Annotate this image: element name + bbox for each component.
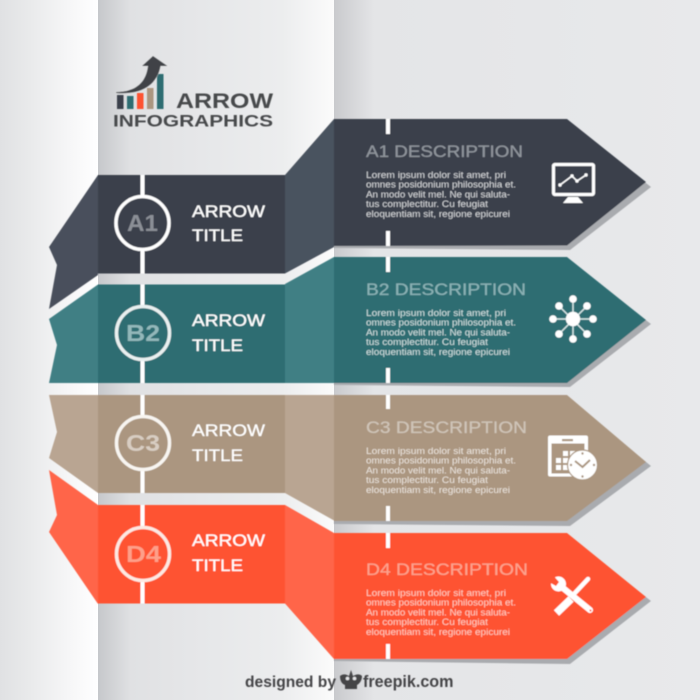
description body: An modo velit mel. Ne qui saluta- — [366, 327, 510, 337]
arrow title: ARROW — [192, 202, 265, 221]
credit text: freepik.com: freepik.com — [363, 672, 454, 691]
description heading: C3 DESCRIPTION — [366, 418, 527, 437]
description body: An modo velit mel. Ne qui saluta- — [366, 465, 510, 475]
description body — [366, 588, 516, 637]
description body: omnes posidonium philosophia et. — [366, 456, 516, 466]
title panel — [98, 284, 285, 383]
arrow title — [192, 311, 265, 355]
description body: eloquentiam sit, regione epicurei — [366, 485, 510, 495]
credit text: designed by: designed by — [245, 674, 336, 691]
description body: omnes posidonium philosophia et. — [366, 318, 516, 328]
description heading: D4 DESCRIPTION — [366, 560, 528, 579]
timeline connector — [142, 257, 388, 383]
arrow band B2 — [49, 257, 651, 387]
description body: eloquentiam sit, regione epicurei — [366, 347, 510, 357]
description body: Lorem ipsum dolor sit amet, pri — [366, 170, 506, 180]
icon: calendar and clock — [548, 436, 598, 480]
arrow title: ARROW — [192, 421, 265, 440]
left fold — [49, 395, 98, 493]
title panel — [98, 395, 285, 493]
description arrow — [334, 119, 646, 246]
middle fold — [285, 505, 334, 659]
arrow shadow — [334, 538, 651, 664]
logo heading: infographics: INFOGRAPHICS — [113, 112, 273, 130]
badge D4 — [116, 528, 170, 580]
left fold — [49, 175, 98, 309]
arrow shadow — [334, 262, 651, 387]
description body: Lorem ipsum dolor sit amet, pri — [366, 308, 506, 318]
arrow title — [192, 202, 265, 245]
middle fold — [285, 119, 334, 274]
badge A1: A1 — [127, 210, 158, 236]
icon: monitor with line chart — [554, 164, 594, 203]
arrow title — [192, 531, 265, 575]
footer credit — [245, 670, 454, 691]
description body: eloquentiam sit, regione epicurei — [366, 627, 510, 637]
description body: tus complectitur. Cu feugiat — [366, 337, 489, 347]
description body: An modo velit mel. Ne qui saluta- — [366, 607, 510, 617]
badge B2: B2 — [126, 320, 160, 346]
description arrow — [334, 395, 646, 521]
icon: rising bar chart with arrow — [116, 56, 168, 109]
middle fold — [285, 257, 334, 383]
description body — [366, 446, 516, 495]
description heading: B2 DESCRIPTION — [366, 280, 526, 299]
arrow title: ARROW — [192, 311, 265, 330]
icon: wrench and screwdriver — [547, 574, 592, 613]
arrow title: ARROW — [192, 531, 265, 550]
arrow shadow — [334, 400, 651, 526]
description arrow — [334, 533, 646, 659]
arrow title: TITLE — [192, 336, 243, 355]
arrow title: TITLE — [192, 556, 243, 575]
arrow title: TITLE — [192, 446, 243, 465]
icon: network hub — [549, 295, 597, 343]
left fold — [49, 470, 98, 604]
timeline connector — [142, 395, 388, 521]
badge C3: C3 — [126, 430, 160, 456]
arrow band D4 — [49, 470, 651, 664]
timeline connector — [142, 505, 388, 659]
description body — [366, 170, 516, 219]
arrow title — [192, 421, 265, 465]
title panel — [98, 505, 285, 604]
logo heading: arrow: ARROW — [176, 90, 273, 113]
description body: tus complectitur. Cu feugiat — [366, 617, 489, 627]
description body: An modo velit mel. Ne qui saluta- — [366, 189, 510, 199]
arrow band C3 — [49, 395, 651, 526]
left fold — [49, 284, 98, 383]
description body: tus complectitur. Cu feugiat — [366, 199, 489, 209]
description body: eloquentiam sit, regione epicurei — [366, 209, 510, 219]
badge C3 — [116, 416, 170, 470]
arrow title: TITLE — [192, 226, 243, 245]
description body — [366, 308, 516, 357]
logo: arrow infographics — [113, 56, 273, 130]
description body: omnes posidonium philosophia et. — [366, 598, 516, 608]
description body: omnes posidonium philosophia et. — [366, 180, 516, 190]
timeline connector — [142, 119, 388, 274]
description body: tus complectitur. Cu feugiat — [366, 475, 489, 485]
middle fold — [285, 395, 334, 520]
description body: Lorem ipsum dolor sit amet, pri — [366, 446, 506, 456]
badge B2 — [116, 306, 170, 360]
description heading: A1 DESCRIPTION — [366, 142, 523, 161]
badge A1 — [116, 196, 169, 250]
arrow shadow — [334, 123, 651, 250]
badge D4: D4 — [126, 541, 161, 567]
icon: freepik crown mark — [340, 670, 362, 689]
arrow band A1 — [49, 119, 651, 309]
description arrow — [334, 257, 646, 383]
title panel — [98, 175, 285, 274]
description body: Lorem ipsum dolor sit amet, pri — [366, 588, 506, 598]
